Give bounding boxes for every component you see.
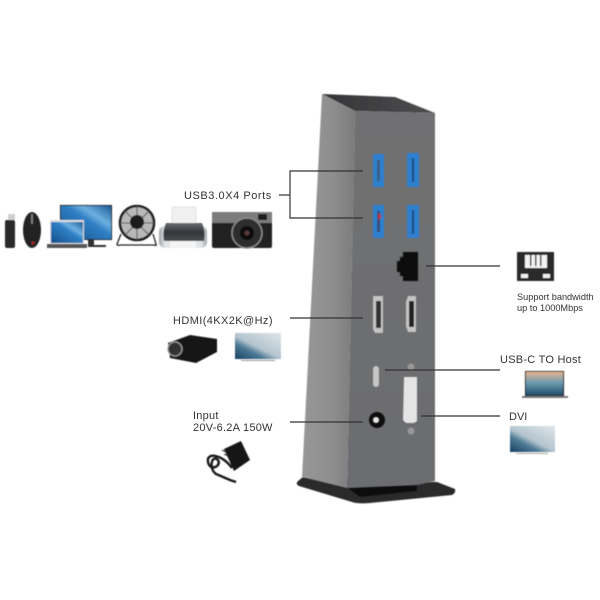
icon: laptop	[522, 371, 568, 398]
DVI port	[403, 364, 417, 434]
stand base	[297, 477, 455, 503]
icon: monitor and laptop	[47, 205, 112, 248]
label: bandwidth: Support bandwidth	[517, 292, 594, 302]
label: USB3.0 ports: USB3.0X4 Ports	[184, 190, 272, 202]
tower side face	[302, 94, 355, 488]
power jack	[369, 412, 385, 428]
icon: camera	[212, 212, 272, 248]
label: USB-C to host: USB-C TO Host	[500, 354, 581, 366]
icon: power adapter	[208, 441, 250, 482]
label: power input: 20V-6.2A 150W	[193, 422, 273, 434]
USB-C port	[373, 366, 379, 387]
icon: RJ45 socket	[517, 252, 554, 281]
label: power input: Input	[193, 410, 219, 422]
HDMI ports	[373, 296, 416, 333]
tower top face	[322, 94, 435, 113]
label: DVI: DVI	[509, 411, 527, 423]
USB 3.0 ports	[373, 153, 419, 238]
label: bandwidth: up to 1000Mbps	[517, 303, 583, 313]
RJ45 port	[397, 252, 418, 281]
tower front face	[347, 111, 435, 488]
icon: mouse	[23, 212, 41, 248]
icon: DVI display	[510, 426, 555, 454]
dock tower	[302, 94, 435, 488]
connector lines	[279, 171, 500, 422]
icon: printer	[159, 207, 207, 248]
icon: HDMI display	[235, 333, 281, 361]
icon: USB stick	[5, 214, 15, 248]
icon: desk fan	[117, 206, 156, 245]
label: HDMI: HDMI(4KX2K@Hz)	[173, 315, 273, 327]
icon: projector	[168, 335, 217, 363]
